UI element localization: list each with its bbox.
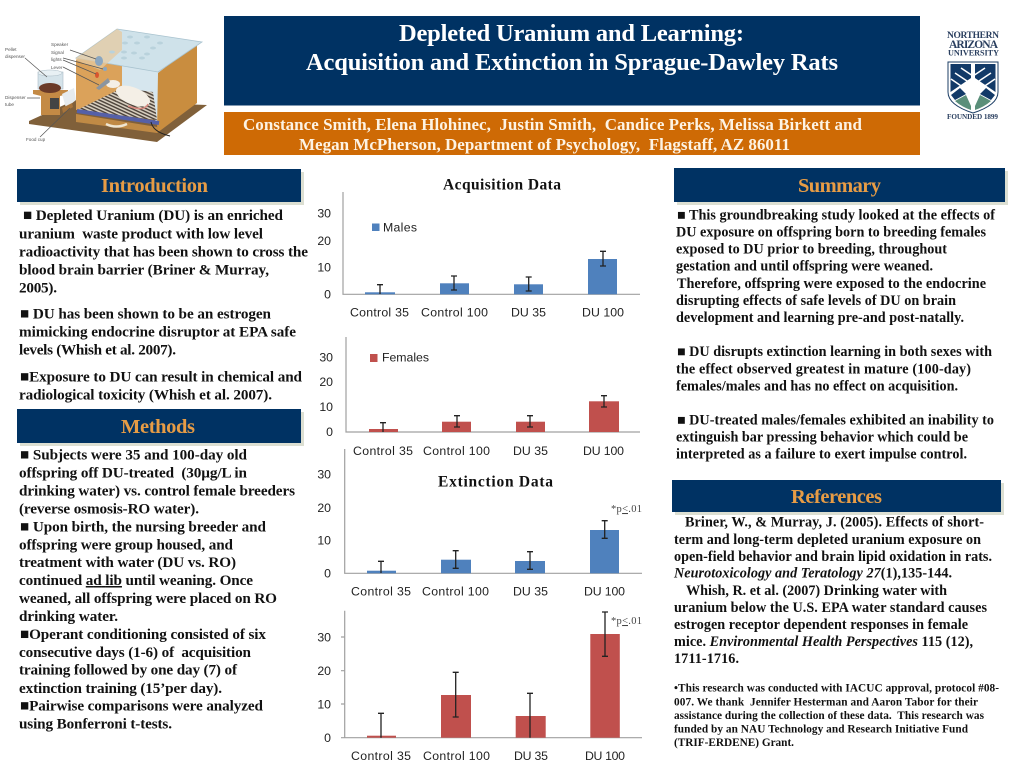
bar chart: extinction females: Control 35 xyxy=(351,749,411,763)
text block: methods bullets: ■ Upon birth, the nursing breeder and xyxy=(20,518,267,535)
text block: methods bullets xyxy=(19,446,295,733)
title banner: Depleted Uranium and Learning: xyxy=(399,20,744,47)
text block: methods bullets: extinction training (15’per day). xyxy=(19,680,222,697)
bar chart: extinction males: 20 xyxy=(317,501,331,515)
bar chart: extinction males: DU 35 xyxy=(513,585,548,599)
heading: methods: Methods xyxy=(121,416,195,438)
bar chart: extinction males: 10 xyxy=(317,534,331,548)
text block: summary bullets: gestation and until offspring were weaned. xyxy=(676,259,933,275)
text block: reference list: mice. Environmental Health Perspectives 115 (12), xyxy=(674,634,973,650)
authors banner: Megan McPherson, Department of Psychology, Flagstaff, AZ 86011 xyxy=(299,135,790,154)
text block: reference list xyxy=(673,515,992,667)
heading: references: References xyxy=(791,486,882,508)
heading: references xyxy=(672,480,1004,515)
text block: introduction bullets xyxy=(19,207,308,403)
text block: summary bullets xyxy=(676,207,995,462)
illustration: operant conditioning chamber: Lever xyxy=(51,65,63,70)
illustration: operant conditioning chamber: Pellet xyxy=(5,47,17,52)
text block: methods bullets: consecutive days (1-6) of acquisition xyxy=(19,644,252,661)
logo: Northern Arizona University: ARIZONA xyxy=(949,39,999,51)
panel: introduction xyxy=(17,169,308,403)
heading: introduction xyxy=(17,169,304,205)
text block: summary bullets: extinguish bar pressing behavior which could be xyxy=(676,429,968,445)
text block: introduction bullets: ■Exposure to DU can result in chemical and xyxy=(20,369,303,386)
text block: introduction bullets: radiological toxicity (Whish et al. 2007). xyxy=(19,386,272,403)
illustration: operant conditioning chamber xyxy=(5,29,207,142)
bar chart: acquisition females: 20 xyxy=(319,375,333,389)
text block: methods bullets: ■Operant conditioning consisted of six xyxy=(20,626,266,643)
text block: reference list: uranium below the U.S. EPA water standard causes xyxy=(674,600,987,616)
bar chart: acquisition males: 0 xyxy=(324,288,331,302)
text block: reference list: estrogen receptor dependent responses in female xyxy=(674,617,968,633)
logo: Northern Arizona University: UNIVERSITY xyxy=(948,48,999,58)
text block: methods bullets: training followed by one day (7) of xyxy=(19,662,238,679)
bar chart: extinction males: 0 xyxy=(324,566,331,580)
heading: summary xyxy=(674,168,1008,205)
illustration: operant conditioning chamber: Signal xyxy=(51,50,64,55)
authors banner: Constance Smith, Elena Hlohinec, Justin Smith, Candice Perks, Melissa Birkett and xyxy=(243,115,863,134)
bar chart: extinction males: DU 100 xyxy=(584,585,625,599)
text block: methods bullets: weaned, all offspring were placed on RO xyxy=(19,590,277,607)
bar chart: extinction females: DU 35 xyxy=(514,749,548,763)
text block: summary bullets: interpreted as a failure to exert impulse control. xyxy=(676,446,967,462)
text block: methods bullets: continued ad lib until weaning. Once xyxy=(19,572,253,589)
text block: methods bullets: drinking water. xyxy=(19,608,118,625)
text block: reference list: Briner, W., & Murray, J. (2005). Effects of short- xyxy=(685,515,984,531)
bar chart: extinction females xyxy=(317,611,642,763)
title banner xyxy=(224,16,920,106)
illustration: operant conditioning chamber: tube xyxy=(5,102,14,107)
text block: methods bullets: ■Pairwise comparisons were analyzed xyxy=(20,698,264,715)
text block: methods bullets: treatment with water (DU vs. RO) xyxy=(19,554,236,571)
bar chart: acquisition males: 20 xyxy=(317,234,331,248)
text block: methods bullets: offspring off DU-treated (30µg/L in xyxy=(19,464,248,481)
bar chart: acquisition males: 30 xyxy=(317,206,331,220)
text block: methods bullets: drinking water) vs. control female breeders xyxy=(19,482,295,499)
panel: methods xyxy=(17,409,304,733)
text block: summary bullets: development and learning pre-and post-natally. xyxy=(676,310,964,326)
illustration: operant conditioning chamber: Dispenser xyxy=(5,95,26,100)
text block: summary bullets: Therefore, offspring were exposed to the endocrine xyxy=(677,276,986,292)
text block: reference list: term and long-term depleted uranium exposure on xyxy=(674,532,981,548)
text block: introduction bullets: radioactivity that has been shown to cross the xyxy=(19,244,308,261)
text block: acknowledgements: 007. We thank Jennifer Hesterman and Aaron Tabor for their xyxy=(674,696,978,708)
bar chart: extinction females: 10 xyxy=(317,698,331,712)
logo: Northern Arizona University: NORTHERN xyxy=(947,31,999,41)
legend: males: Males xyxy=(383,221,417,235)
illustration: operant conditioning chamber: dispenser xyxy=(5,54,25,59)
heading: introduction: Introduction xyxy=(101,175,209,197)
authors banner xyxy=(224,112,920,155)
panel: summary xyxy=(674,168,1008,462)
bar chart: acquisition males: Control 100 xyxy=(421,306,488,320)
text block: introduction bullets: uranium waste product with low level xyxy=(19,225,263,242)
illustration: operant conditioning chamber: Speaker xyxy=(51,42,69,47)
text block: introduction bullets: levels (Whish et al. 2007). xyxy=(19,341,176,358)
bar chart: acquisition males xyxy=(317,192,640,320)
bar chart: acquisition males: 10 xyxy=(317,260,331,274)
text block: introduction bullets: mimicking endocrine disruptor at EPA safe xyxy=(19,324,296,341)
text block: acknowledgements: (TRIF-ERDENE) Grant. xyxy=(674,737,794,749)
text block: summary bullets: females/males and has no effect on acquisition. xyxy=(676,378,958,394)
text block: acknowledgements: funded by an NAU Technology and Research Initiative Fund xyxy=(674,724,969,736)
bar chart: acquisition females: DU 35 xyxy=(513,444,548,458)
text block: introduction bullets: ■ DU has been shown to be an estrogen xyxy=(20,305,272,322)
bar chart: acquisition males: Control 35 xyxy=(350,306,409,320)
bar chart: extinction females: Control 100 xyxy=(423,749,490,763)
text block: methods bullets: offspring were group housed, and xyxy=(19,536,234,553)
bar chart: acquisition males: DU 35 xyxy=(511,306,546,320)
bar chart: acquisition females: DU 100 xyxy=(583,444,624,458)
illustration: operant conditioning chamber: lights xyxy=(51,57,62,62)
bar chart: extinction males xyxy=(317,449,642,599)
legend: females: Females xyxy=(382,351,429,365)
bar chart: acquisition females: 0 xyxy=(326,425,333,439)
text block: reference list: open-field behavior and brain lipid oxidation in rats. xyxy=(674,549,992,565)
text block: introduction bullets: 2005). xyxy=(19,279,57,296)
text block: acknowledgements xyxy=(674,683,999,749)
bar chart: extinction females: 0 xyxy=(324,731,331,745)
text block: reference list: 1711-1716. xyxy=(674,651,739,667)
text block: summary bullets: ■ DU disrupts extinction learning in both sexes with xyxy=(677,344,992,360)
heading: acquisition data: Acquisition Data xyxy=(443,176,561,193)
logo: Northern Arizona University xyxy=(947,31,999,121)
bar chart: acquisition males: DU 100 xyxy=(582,306,624,320)
text block: summary bullets: ■ This groundbreaking study looked at the effects of xyxy=(677,207,995,223)
panel: references xyxy=(672,480,1004,749)
bar chart: acquisition females: Control 100 xyxy=(423,444,490,458)
heading: extinction data: Extinction Data xyxy=(438,474,553,491)
bar chart: extinction females: DU 100 xyxy=(585,749,625,763)
logo: Northern Arizona University: FOUNDED 1899 xyxy=(947,113,998,121)
bar chart: extinction males: Control 35 xyxy=(351,585,411,599)
significance note: *p<.01 xyxy=(611,504,642,515)
bar chart: acquisition females: 30 xyxy=(319,350,333,364)
heading: methods xyxy=(17,409,304,446)
bar chart: acquisition females: 10 xyxy=(319,400,333,414)
text block: summary bullets: the effect observed greatest in mature (100-day) xyxy=(676,361,971,377)
text block: reference list: Whish, R. et al. (2007) Drinking water with xyxy=(686,583,947,599)
text block: summary bullets: disrupting effects of safe levels of DU on brain xyxy=(676,293,956,309)
bar chart: acquisition females xyxy=(319,337,640,458)
text block: methods bullets: using Bonferroni t-tests. xyxy=(19,716,172,733)
bar chart: extinction females: 20 xyxy=(317,664,331,678)
title banner: Acquisition and Extinction in Sprague-Dawley Rats xyxy=(306,49,838,76)
bar chart: extinction males: Control 100 xyxy=(422,585,489,599)
text block: summary bullets: ■ DU-treated males/females exhibited an inability to xyxy=(677,412,994,428)
text block: introduction bullets: ■ Depleted Uranium (DU) is an enriched xyxy=(23,207,284,224)
text block: summary bullets: DU exposure on offspring born to breeding females xyxy=(676,225,986,241)
significance note: *p<.01 xyxy=(611,616,642,627)
bar chart: acquisition females: Control 35 xyxy=(353,444,413,458)
bar chart: extinction males: 30 xyxy=(317,468,331,482)
text block: acknowledgements: assistance during the collection of these data. This research was xyxy=(674,710,985,722)
text block: acknowledgements: •This research was conducted with IACUC approval, protocol #08- xyxy=(674,683,999,695)
text block: introduction bullets: blood brain barrier (Briner & Murray, xyxy=(19,261,269,278)
text block: methods bullets: (reverse osmosis-RO water). xyxy=(19,500,199,517)
text block: reference list: Neurotoxicology and Teratology 27(1),135-144. xyxy=(673,566,952,582)
heading: summary: Summary xyxy=(798,175,882,197)
text block: summary bullets: exposed to DU prior to breeding, throughout xyxy=(676,242,947,258)
text block: methods bullets: ■ Subjects were 35 and 100-day old xyxy=(20,446,248,463)
bar chart: extinction females: 30 xyxy=(317,630,331,644)
illustration: operant conditioning chamber: Food cup xyxy=(26,137,46,142)
